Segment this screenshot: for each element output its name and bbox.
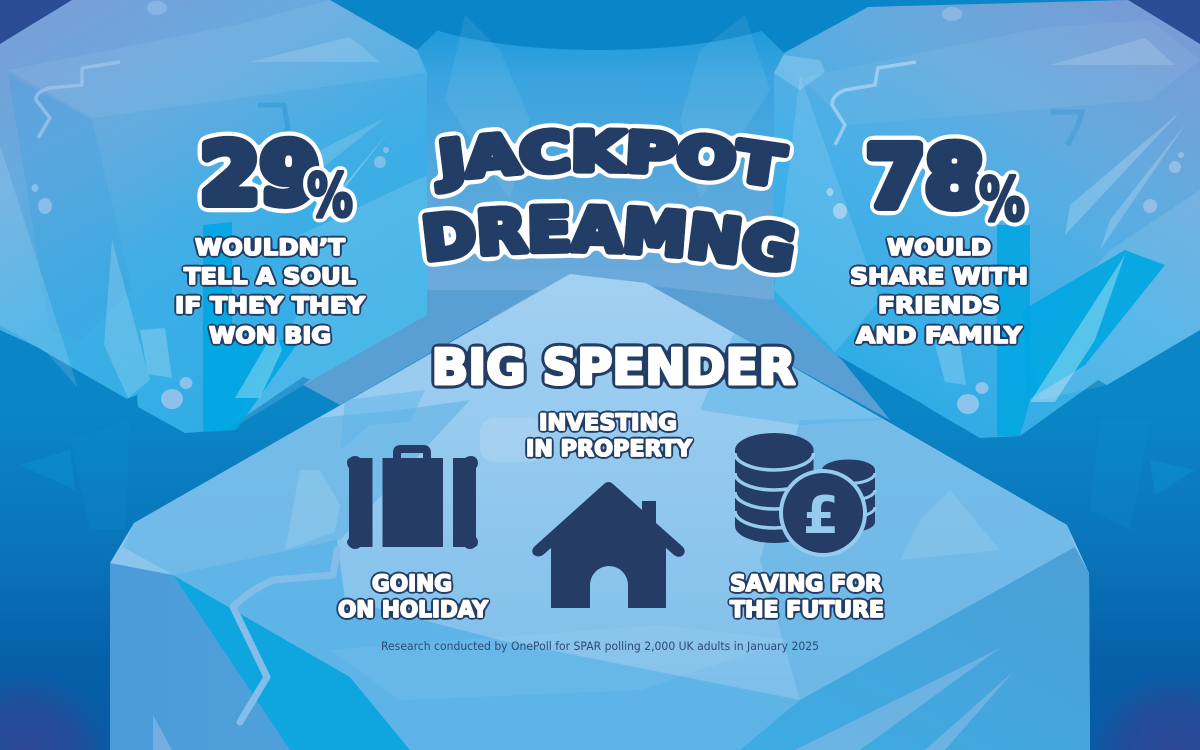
heading: big spender: BIG SPENDER [432,339,796,396]
text: going on holiday: ON HOLIDAY [338,598,489,623]
stat: 78 percent [866,128,1025,235]
text: saving for the future: SAVING FOR [730,572,882,597]
text: would share with friends and family: FRIENDS [878,294,1000,319]
text: would share with friends and family: SHARE WITH [850,265,1028,290]
title [418,122,800,278]
text: investing in property: IN PROPERTY [526,437,693,462]
text: saving for the future: THE FUTURE [730,598,884,623]
stat: 29 percent: 29 [200,125,320,223]
icon: suitcase [347,445,478,549]
text: investing in property [526,411,693,462]
icon: house [532,482,685,608]
text: would share with friends and family [850,236,1028,349]
text: wouldn't tell a soul: TELL A SOUL [184,265,356,290]
text: going on holiday [338,572,489,623]
text: would share with friends and family: WOULD [887,236,991,261]
text: wouldn't tell a soul [175,236,366,349]
text: wouldn't tell a soul: WOULDN’T [195,236,345,261]
text: wouldn't tell a soul: IF THEY THEY [175,294,366,319]
stat: 78 percent: 78 [866,128,984,226]
panel: centre ice cube [110,274,1090,750]
icon: coins with pound sign: £ [803,486,839,546]
title: DREAMNG [418,198,800,278]
panel: left ice cube [0,0,427,433]
text: saving for the future [730,572,884,623]
footnote: Research conducted by OnePoll for SPAR polling 2,000 UK adults in January 2025 [381,639,819,653]
text: would share with friends and family: AND FAMILY [856,324,1023,349]
text: going on holiday: GOING [372,572,452,597]
icon: coins with pound sign [735,433,875,557]
text: investing in property: INVESTING [539,411,677,436]
stat: 29 percent: % [307,161,353,231]
text: wouldn't tell a soul: WON BIG [209,324,331,349]
panel: right ice cube [774,0,1200,438]
title: JACKPOT [430,122,794,199]
stat: 78 percent: % [979,165,1025,235]
